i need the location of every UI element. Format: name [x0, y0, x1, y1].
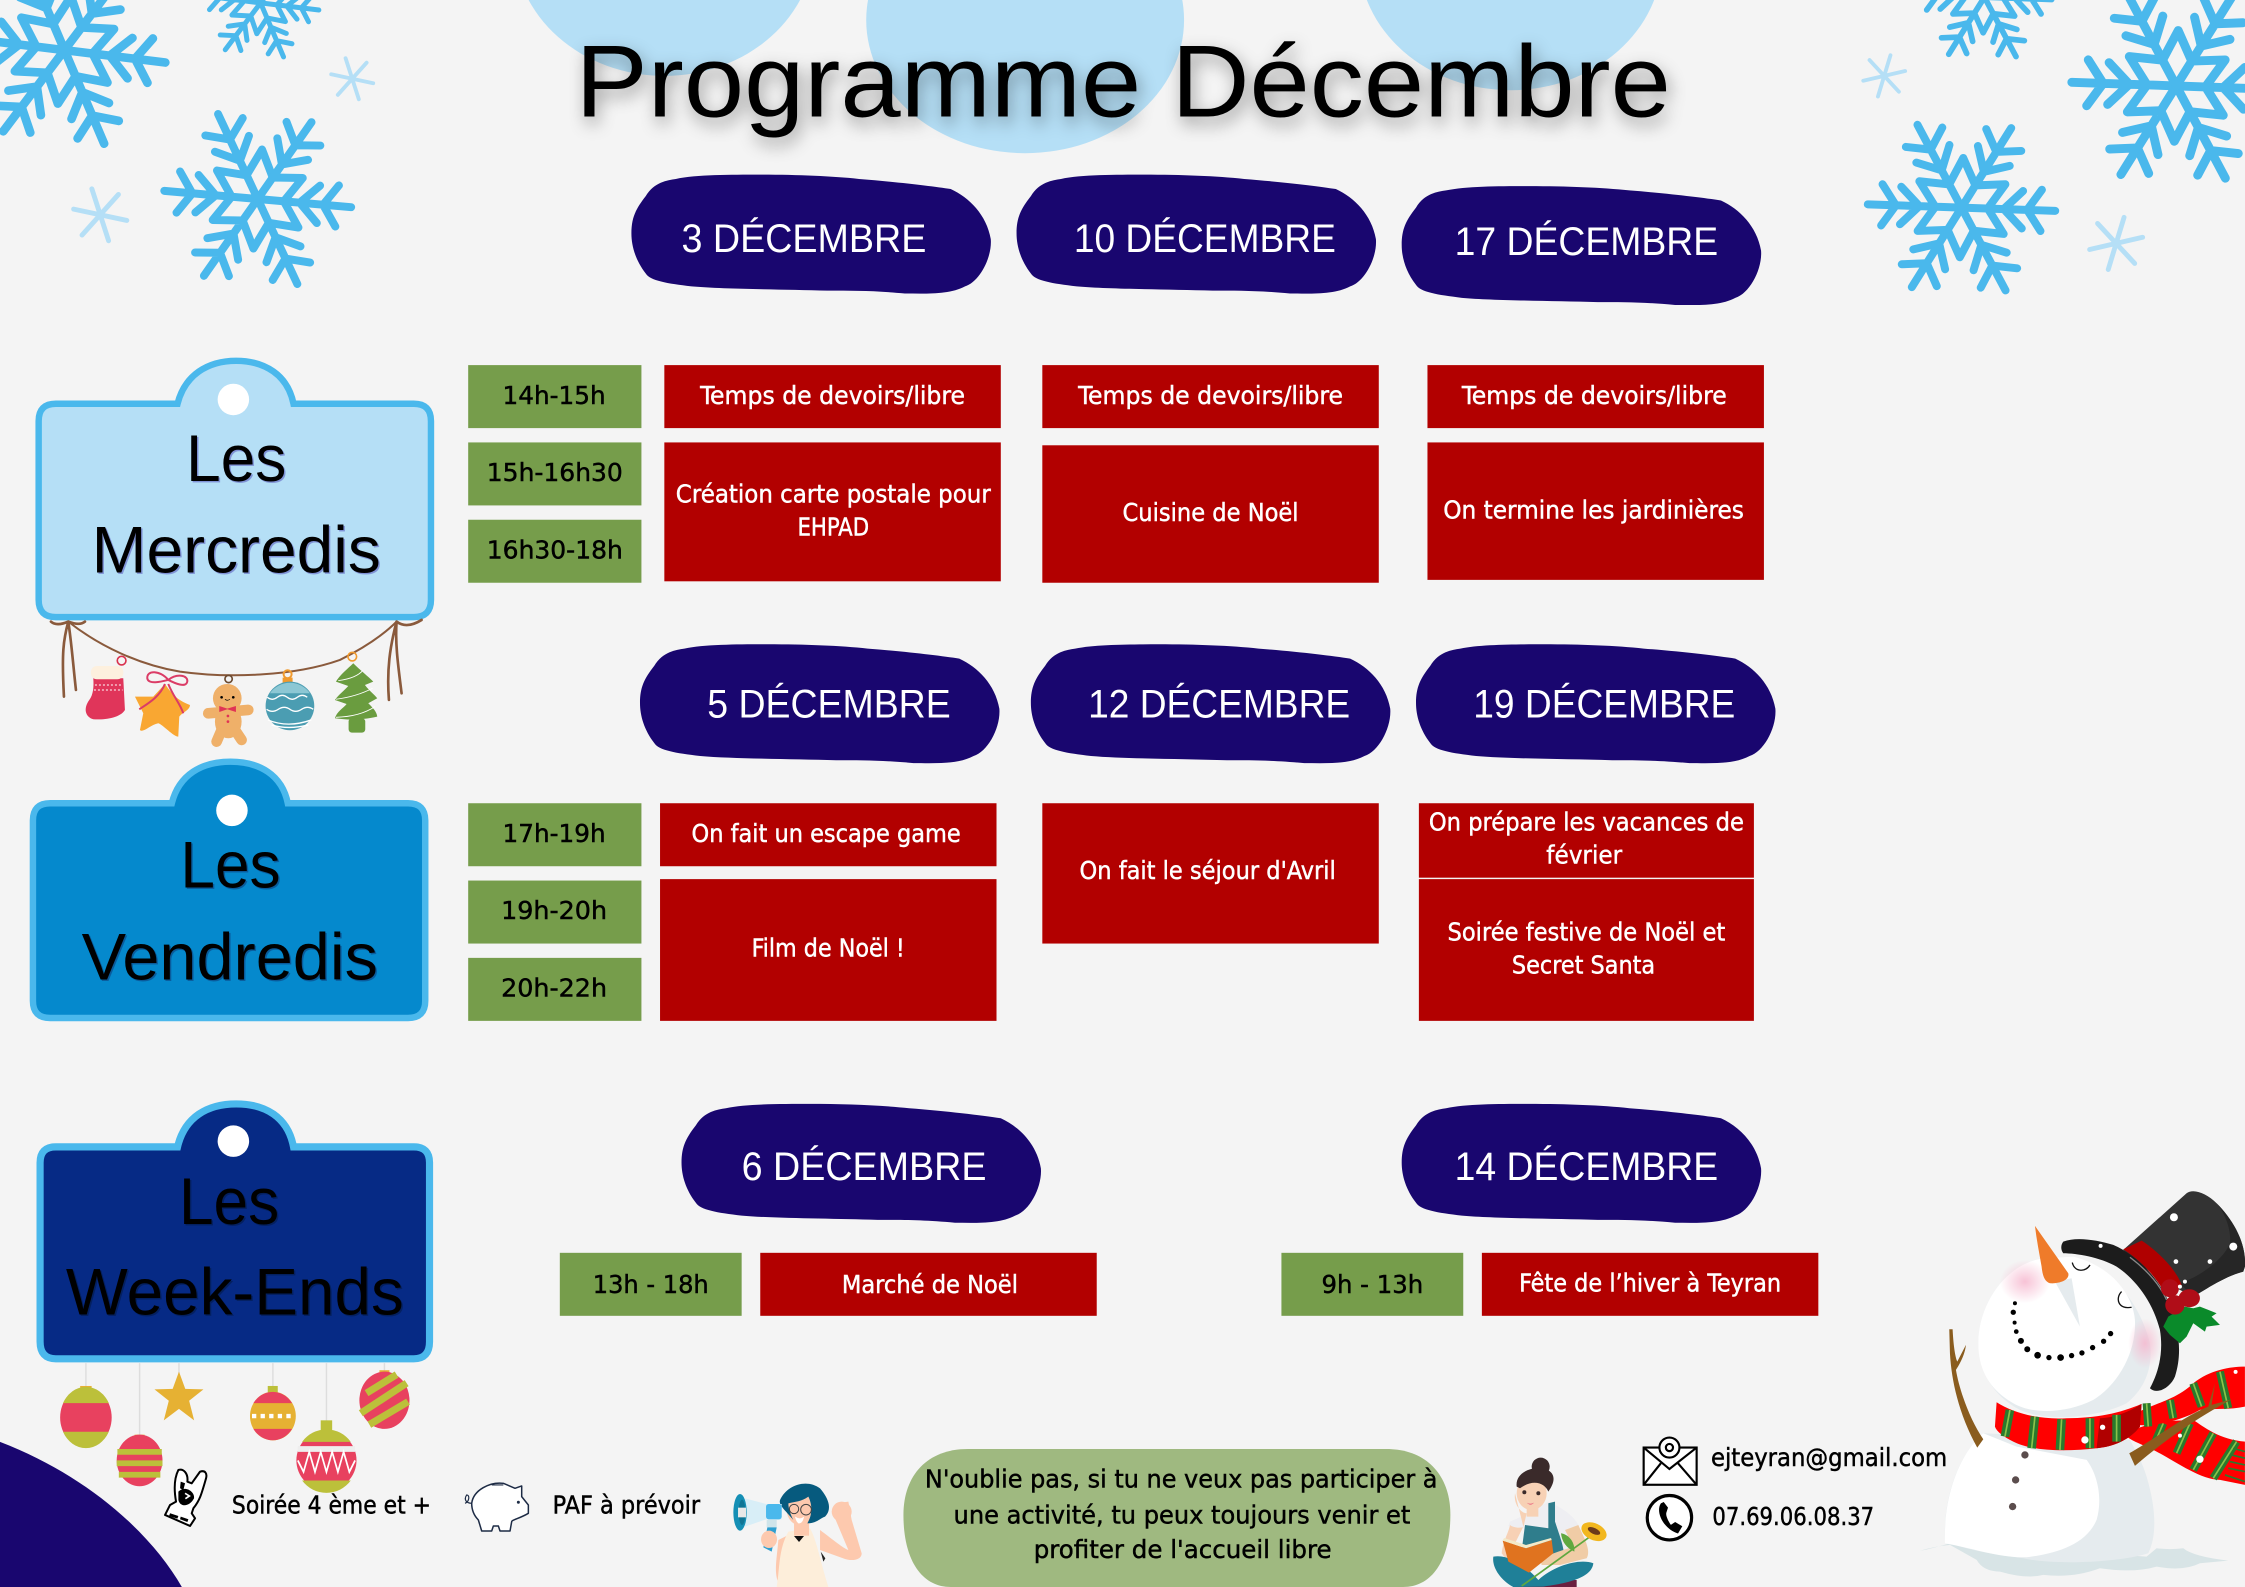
panel: Les Vendredis tag: Les: [180, 828, 281, 902]
illustration: snowman: [1920, 1191, 2245, 1576]
date pill: 17 décembre: [1402, 186, 1761, 305]
callout: accueil libre reminder: [903, 1449, 1450, 1587]
panel: Les Vendredis tag: [33, 762, 425, 1018]
ornament: tree: [335, 652, 377, 733]
date pill: 3 décembre: [631, 175, 991, 294]
ornament: stocking: [86, 656, 126, 719]
berries: [2161, 1279, 2200, 1315]
activities: 19 décembre: [1419, 803, 1754, 1021]
icon: piggy bank: [465, 1483, 528, 1531]
panel: Les Week-Ends tag: Week-Ends: [66, 1254, 404, 1328]
activities: 5 décembre: [660, 803, 997, 1021]
callout: accueil libre reminder: N'oublie pas, si tu ne veux pas participer à: [925, 1465, 1437, 1494]
date pill: 14 décembre: 14 DÉCEMBRE: [1455, 1144, 1718, 1189]
icon: snowflake top right small: [1915, 0, 2054, 67]
icon: phone: [1647, 1496, 1692, 1540]
buttons: [2009, 1451, 2029, 1510]
date pill: 19 décembre: 19 DÉCEMBRE: [1473, 681, 1735, 726]
panel: Les Week-Ends tag: [40, 1104, 430, 1359]
date pill: 5 décembre: 5 DÉCEMBRE: [707, 681, 951, 726]
schedule: Mercredis time slots: 14h-15h: [503, 381, 606, 410]
date pill: 12 décembre: [1031, 644, 1390, 763]
scarf tail upper: [2133, 1367, 2245, 1425]
smile: [2011, 1301, 2113, 1361]
contact: email: ejteyran@gmail.com: [1711, 1443, 1947, 1472]
icon: rock hand: [165, 1470, 206, 1526]
activities: 3 décembre: Création carte postale pour: [676, 480, 992, 509]
star ornament: [154, 1372, 203, 1420]
legend: soirée: Soirée 4 ème et +: [232, 1490, 431, 1519]
nose shade: [2055, 1278, 2080, 1327]
date pill: 10 décembre: [1017, 175, 1376, 294]
bauble 3: [250, 1386, 296, 1440]
legend: PAF: PAF à prévoir: [553, 1490, 701, 1519]
eyes: [2072, 1263, 2132, 1308]
hat crown: [2123, 1191, 2245, 1297]
schedule: Vendredis time slots: [468, 803, 641, 1021]
activities: 10 décembre: Temps de devoirs/libre: [1077, 381, 1343, 410]
activities: 3 décembre: [664, 365, 1001, 581]
icon: light spark right: [2084, 214, 2148, 273]
head: [1978, 1257, 2151, 1417]
ornament: gingerbread: [208, 675, 248, 742]
callout: accueil libre reminder: profiter de l'accueil libre: [1034, 1535, 1332, 1564]
schedule: 6 décembre: Marché de Noël: [842, 1270, 1018, 1299]
schedule: 14 décembre: 9h - 13h: [1322, 1270, 1423, 1299]
date pill: 10 décembre: 10 DÉCEMBRE: [1074, 216, 1336, 261]
scarf tail lower: [2127, 1420, 2245, 1485]
decorative blue circles at top: [514, 0, 1662, 153]
date pill: 5 décembre: [640, 644, 999, 763]
contact: phone number: 07.69.06.08.37: [1712, 1502, 1874, 1531]
illustration: garland with ornaments: [51, 620, 422, 742]
title: Programme Décembre: [576, 25, 1671, 139]
icon: email envelope: [1644, 1438, 1697, 1485]
icon: snowflake right: [1865, 111, 2059, 304]
schedule: 6 décembre: [560, 1253, 1097, 1316]
activities: 17 décembre: [1427, 365, 1764, 580]
activities: 3 décembre: EHPAD: [797, 512, 869, 541]
activities: 19 décembre: février: [1546, 840, 1623, 869]
activities: 17 décembre: Temps de devoirs/libre: [1461, 381, 1727, 410]
date pill: 6 décembre: [682, 1104, 1041, 1223]
illustration: girl reading: [1493, 1458, 1610, 1587]
right arm: [2129, 1383, 2232, 1466]
panel: Les Mercredis tag: [39, 361, 431, 617]
activities: 19 décembre: Soirée festive de Noël et: [1448, 918, 1725, 947]
icon: snowflake top left: [0, 0, 178, 163]
activities: 17 décembre: On termine les jardinières: [1443, 495, 1744, 524]
body: [1945, 1433, 2154, 1562]
schedule: 14 décembre: [1281, 1253, 1818, 1316]
schedule: 14 décembre: Fête de l’hiver à Teyran: [1519, 1268, 1781, 1297]
panel: Les Week-Ends tag: Les: [179, 1164, 279, 1238]
bauble 2: [117, 1435, 163, 1486]
activities: 19 décembre: Secret Santa: [1512, 951, 1655, 980]
bauble 1: [60, 1386, 112, 1448]
activities: 5 décembre: On fait un escape game: [692, 819, 961, 848]
illustration: woman with megaphone: [733, 1484, 862, 1587]
schedule: Mercredis time slots: 16h30-18h: [487, 535, 623, 564]
bauble 4: [296, 1420, 357, 1493]
icon: light spark left top: [327, 56, 377, 101]
scarf neck: [1995, 1402, 2142, 1450]
icon: light spark left: [69, 186, 132, 244]
icon: light spark right top: [1859, 53, 1909, 99]
hat band: [2123, 1241, 2182, 1297]
date pill: 17 décembre: 17 DÉCEMBRE: [1455, 219, 1718, 264]
activities: 5 décembre: Film de Noël !: [752, 933, 905, 962]
activities: 10 décembre: Cuisine de Noël: [1122, 498, 1299, 527]
activities: 12 décembre: On fait le séjour d'Avril: [1080, 856, 1336, 885]
schedule: Mercredis time slots: 15h-16h30: [487, 458, 623, 487]
schedule: Vendredis time slots: 20h-22h: [501, 974, 607, 1003]
date pill: 14 décembre: [1402, 1104, 1761, 1223]
icon: snowflake top small: [195, 0, 326, 68]
bauble 5: [359, 1370, 409, 1429]
schedule: Vendredis time slots: 19h-20h: [501, 896, 607, 925]
hat brim: [2061, 1239, 2179, 1391]
activities: 19 décembre: On prépare les vacances de: [1429, 807, 1744, 836]
panel: Les Vendredis tag: Vendredis: [82, 919, 378, 993]
activities: 12 décembre: [1042, 803, 1379, 944]
snow ground: [1920, 1543, 2228, 1576]
icon: snowflake top right: [2068, 0, 2245, 194]
activities: 3 décembre: Temps de devoirs/libre: [699, 381, 965, 410]
date pill: 19 décembre: [1416, 644, 1775, 763]
left arm: [1949, 1329, 1983, 1448]
date pill: 12 décembre: 12 DÉCEMBRE: [1088, 681, 1350, 726]
icon: snowflake left: [156, 98, 359, 300]
corner shape bottom left: [0, 1442, 182, 1587]
nose: [2035, 1226, 2068, 1283]
holly: [2163, 1307, 2220, 1343]
panel: Les Mercredis tag: Les: [186, 421, 286, 495]
illustration: hanging baubles: [60, 1363, 409, 1493]
schedule: Vendredis time slots: 17h-19h: [503, 819, 606, 848]
schedule: 6 décembre: 13h - 18h: [593, 1270, 709, 1299]
hat snow dots: [2099, 1213, 2237, 1289]
ornament: star: [135, 672, 190, 737]
ornament: teal bauble: [266, 670, 314, 730]
activities: 10 décembre: [1042, 365, 1379, 583]
cheeks: [2000, 1260, 2050, 1303]
panel: Les Mercredis tag: Mercredis: [92, 513, 381, 587]
date pill: 6 décembre: 6 DÉCEMBRE: [742, 1144, 986, 1189]
schedule: Mercredis time slots: [468, 365, 641, 583]
date pill: 3 décembre: 3 DÉCEMBRE: [682, 216, 926, 261]
callout: accueil libre reminder: une activité, tu peux toujours venir et: [954, 1500, 1410, 1529]
